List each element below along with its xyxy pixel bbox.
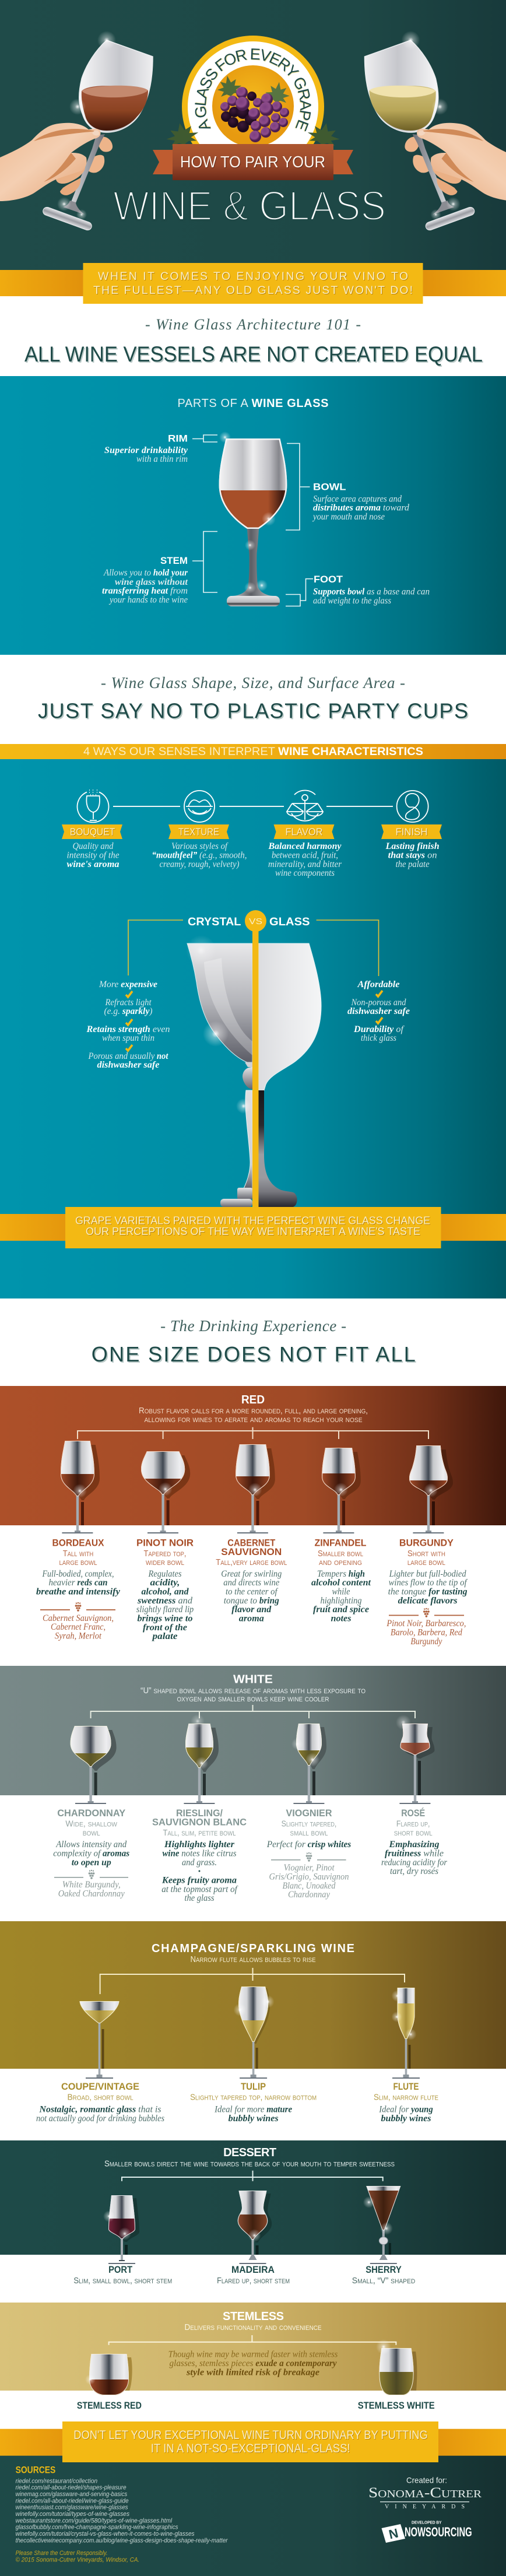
column: sherry: Small, “V” shaped bbox=[352, 2276, 415, 2286]
column: cabernet sauvignon: SAUVIGNON bbox=[221, 1546, 282, 1557]
glass: sherry bbox=[363, 2186, 401, 2264]
gold banner: closing message: DON'T LET YOUR EXCEPTIONAL WINE TURN ORDINARY BY PUTTING bbox=[73, 2428, 428, 2442]
label: bowl: your mouth and nose bbox=[312, 512, 385, 522]
column: chardonnay: to open up bbox=[72, 1858, 111, 1868]
glass: port bbox=[103, 2195, 139, 2264]
column: tulip: TULIP bbox=[241, 2081, 266, 2092]
column: bordeaux: heavier reds can bbox=[49, 1578, 108, 1588]
banner text: WHEN IT COMES TO ENJOYING YOUR VINO TO bbox=[98, 270, 408, 283]
stemless paragraph: Though wine may be warmed faster with stemless bbox=[168, 2350, 338, 2360]
column: rose: Emphasizing bbox=[389, 1840, 440, 1849]
column: cabernet sauvignon bbox=[216, 1538, 287, 1624]
column: chardonnay: complexity of aromas bbox=[53, 1849, 129, 1859]
logo: nowsourcing bbox=[381, 2521, 472, 2543]
column: madeira: Flared up, short stem bbox=[217, 2276, 290, 2286]
column: flute: Ideal for young bbox=[378, 2105, 433, 2115]
column: bordeaux: Tall with bbox=[63, 1549, 93, 1559]
column: port bbox=[73, 2264, 172, 2286]
glass: pinot noir bbox=[141, 1451, 190, 1533]
column: zinfandel: notes bbox=[331, 1614, 351, 1624]
grape clusters bbox=[220, 87, 289, 142]
banner: texture bbox=[168, 824, 229, 839]
sources heading: SOURCES bbox=[16, 2465, 55, 2476]
banner: finish bbox=[381, 824, 442, 839]
column: flute: FLUTE bbox=[393, 2081, 419, 2092]
column: chardonnay bbox=[53, 1808, 129, 1899]
text: flavor: between acid, fruit, bbox=[272, 851, 338, 861]
column: pinot noir: brings wine to bbox=[138, 1614, 192, 1624]
logo: nowsourcing: DEVELOPED BY bbox=[412, 2521, 442, 2525]
logo: sonoma-cutrer: Created for: bbox=[406, 2476, 447, 2485]
icon: grape divider bbox=[389, 1608, 464, 1617]
bracket bbox=[122, 2171, 383, 2181]
bracket bbox=[91, 1705, 415, 1718]
sources list: riedel.com/all-about-riedel/wine-glass-guide bbox=[16, 2497, 129, 2504]
subtitle: architecture 101: - Wine Glass Architecture 101 - bbox=[145, 316, 361, 333]
label: bowl bbox=[312, 482, 410, 522]
connector lines bbox=[113, 806, 393, 807]
column: burgundy: Pinot Noir, Barbaresco, bbox=[386, 1619, 466, 1629]
section description bbox=[140, 1686, 366, 1704]
stemless paragraph bbox=[168, 2350, 338, 2377]
column: pinot noir: front of the bbox=[143, 1623, 187, 1633]
column: riesling sauvignon blanc bbox=[152, 1808, 247, 1903]
column: burgundy: BURGUNDY bbox=[399, 1538, 454, 1549]
banner: bouquet bbox=[62, 824, 122, 839]
column: sherry: SHERRY bbox=[366, 2264, 402, 2275]
text: texture bbox=[152, 841, 247, 869]
text: flavor: wine components bbox=[275, 868, 335, 878]
section description: Narrow flute allows bubbles to rise bbox=[190, 1954, 316, 1964]
disclaimer: Please Share the Cutrer Responsibly. bbox=[16, 2550, 108, 2557]
panel title: PARTS OF A WINE GLASS bbox=[177, 397, 329, 410]
section description: Smaller bowls direct the wine towards the back of your mouth to temper sweetness bbox=[104, 2159, 395, 2169]
label: stem: transferring heat from bbox=[102, 586, 188, 596]
column: viognier: VIOGNIER bbox=[286, 1808, 332, 1819]
column: riesling sauvignon blanc: Keeps fruity aroma bbox=[161, 1876, 237, 1886]
label: stem bbox=[102, 555, 188, 605]
column: flute: bubbly wines bbox=[381, 2114, 431, 2124]
gold banner: grape varietals: OUR PERCEPTIONS OF THE WAY WE INTERPRET A WINE'S TASTE bbox=[86, 1225, 420, 1237]
glass: stemless white bbox=[376, 2339, 417, 2395]
text: bouquet: wine's aroma bbox=[66, 859, 119, 869]
glass: burgundy bbox=[409, 1445, 453, 1533]
column: viognier: small bowl bbox=[290, 1828, 328, 1838]
label: rim bbox=[104, 433, 188, 464]
column: zinfandel: and opening bbox=[319, 1557, 362, 1567]
column: rose: tart, dry rosés bbox=[390, 1866, 438, 1876]
list: glass traits bbox=[347, 980, 410, 1043]
column: rose: ROSÉ bbox=[401, 1808, 425, 1819]
label: foot bbox=[313, 574, 430, 606]
column: pinot noir: alcohol, and bbox=[141, 1587, 189, 1597]
column: viognier: Gris/Grigio, Sauvignon bbox=[269, 1872, 349, 1882]
column: madeira bbox=[217, 2264, 290, 2286]
stemless paragraph: style with limited risk of breakage bbox=[186, 2367, 319, 2377]
column: burgundy: Short with bbox=[407, 1549, 445, 1559]
label: foot: add weight to the glass bbox=[313, 596, 391, 606]
column: chardonnay: Oaked Chardonnay bbox=[58, 1889, 125, 1899]
section description: oxygen and smaller bowls keep wine cooler bbox=[177, 1694, 329, 1704]
column: pinot noir: wider bowl bbox=[146, 1557, 184, 1567]
list: crystal traits: Refracts light bbox=[105, 998, 152, 1008]
section title: RED bbox=[241, 1394, 265, 1406]
glass: zinfandel bbox=[322, 1448, 361, 1533]
text: bouquet: Quality and bbox=[72, 841, 114, 851]
text: finish: that stays on bbox=[388, 851, 437, 861]
column: bordeaux: Syrah, Merlot bbox=[55, 1631, 101, 1641]
icon: flavor scale bbox=[287, 790, 323, 821]
column: bordeaux: breathe and intensify bbox=[36, 1587, 121, 1597]
column: viognier: Viognier, Pinot bbox=[283, 1863, 335, 1873]
column: burgundy: large bowl bbox=[407, 1557, 445, 1567]
label: stemless red: STEMLESS RED bbox=[77, 2400, 142, 2411]
list: crystal traits: More expensive bbox=[99, 980, 157, 989]
panel: header bbox=[0, 0, 506, 270]
right hand holding white wine glass bbox=[365, 31, 506, 231]
label: stem: STEM bbox=[160, 555, 188, 566]
column: cabernet sauvignon: Great for swirling bbox=[221, 1569, 282, 1579]
column: burgundy: the tongue for tasting bbox=[388, 1587, 468, 1597]
gold strip: 4 ways: 4 WAYS OUR SENSES INTERPRET WINE CHARACTERISTICS bbox=[83, 745, 423, 758]
gold strip: 4 ways bbox=[0, 744, 506, 759]
column: zinfandel: while bbox=[332, 1587, 350, 1597]
label: bowl: BOWL bbox=[313, 482, 346, 492]
subtitle: shape size surface area: - Wine Glass Shape, Size, and Surface Area - bbox=[101, 674, 405, 692]
column: rose: Flared up, bbox=[396, 1819, 430, 1829]
text: bouquet bbox=[66, 841, 119, 869]
column: tulip: Ideal for more mature bbox=[214, 2105, 292, 2115]
text: bouquet: intensity of the bbox=[66, 851, 119, 861]
column: pinot noir: PINOT NOIR bbox=[136, 1538, 194, 1549]
column: riesling sauvignon blanc: Tall, slim, petite bowl bbox=[163, 1828, 236, 1838]
label: rim: with a thin rim bbox=[136, 454, 188, 464]
logo: nowsourcing: N bbox=[388, 2526, 400, 2542]
column: cabernet sauvignon: CABERNET bbox=[227, 1538, 276, 1549]
panel: dessert bbox=[0, 2140, 506, 2264]
banner: bouquet: BOUQUET bbox=[70, 826, 115, 838]
glass: tulip bbox=[234, 1987, 275, 2079]
column: flute: Slim, narrow flute bbox=[374, 2093, 438, 2103]
column: burgundy bbox=[386, 1538, 468, 1647]
glass: chardonnay bbox=[71, 1726, 117, 1804]
text: flavor: minerality, and bitter bbox=[268, 859, 342, 869]
panel: footer bbox=[0, 2455, 506, 2576]
icon: grape divider bbox=[271, 1852, 346, 1862]
column: bordeaux bbox=[36, 1538, 121, 1641]
icon: texture lips bbox=[184, 791, 215, 822]
glass: cabernet sauvignon bbox=[236, 1444, 275, 1533]
gold banner: intro bbox=[0, 263, 506, 304]
column: bordeaux: Full-bodied, complex, bbox=[42, 1569, 114, 1579]
bracket bbox=[100, 1968, 405, 1994]
badge arc text: A GLASS FOR EVERY GRAPE bbox=[195, 48, 311, 132]
bracket lines bbox=[192, 435, 313, 606]
gold banner: closing message bbox=[0, 2421, 506, 2462]
label: foot: Supports bowl as a base and can bbox=[313, 587, 430, 597]
section description: “U” shaped bowl allows release of aromas with less exposure to bbox=[140, 1686, 366, 1696]
list: crystal traits bbox=[86, 980, 170, 1070]
grape leaves bbox=[164, 73, 342, 148]
section title: STEMLESS bbox=[223, 2310, 284, 2323]
icon: grape divider bbox=[40, 1602, 115, 1612]
column: viognier: Slightly tapered, bbox=[282, 1819, 336, 1829]
large glass diagram bbox=[219, 431, 287, 606]
column: zinfandel bbox=[311, 1538, 371, 1624]
icon: bouquet glass bbox=[77, 790, 108, 822]
label: foot: FOOT bbox=[314, 574, 343, 585]
heading: crystal vs glass: GLASS bbox=[269, 916, 310, 928]
section title: WHITE bbox=[233, 1673, 273, 1686]
column: zinfandel: alcohol content bbox=[311, 1578, 371, 1588]
sources list: winefolly.com/tutorial/types-of-wine-glasses bbox=[16, 2511, 130, 2518]
sources list: riedel.com/all-about-riedel/shapes-pleasure bbox=[16, 2484, 126, 2491]
column: zinfandel: Tempers high bbox=[317, 1569, 365, 1579]
column: port: Slim, small bowl, short stem bbox=[73, 2276, 172, 2286]
icon: finish loop bbox=[397, 791, 428, 822]
sources list: riedel.com/restaurant/collection bbox=[16, 2477, 97, 2484]
column: chardonnay: Allows intensity and bbox=[55, 1840, 127, 1849]
panel: red bbox=[0, 1386, 506, 1533]
label: bowl: distributes aroma toward bbox=[313, 503, 410, 513]
column: viognier: Perfect for crisp whites bbox=[266, 1840, 351, 1849]
column: rose bbox=[381, 1808, 448, 1876]
stemless paragraph: glasses, stemless pieces exude a contemporary bbox=[169, 2359, 337, 2368]
icon: grape divider bbox=[54, 1870, 128, 1879]
half glass illustration: crystal and glass bbox=[186, 927, 321, 1207]
logo: sonoma-cutrer: VINEYARDS bbox=[385, 2504, 465, 2510]
label: bowl: Surface area captures and bbox=[313, 494, 402, 504]
list: crystal traits: Retains strength even bbox=[86, 1024, 170, 1034]
section description: Delivers functionality and convenience bbox=[184, 2322, 322, 2332]
column: cabernet sauvignon: to the center of bbox=[226, 1587, 279, 1597]
column: zinfandel: highlighting bbox=[321, 1596, 361, 1606]
glass: bordeaux bbox=[61, 1441, 100, 1533]
label: stem: your hands to the wine bbox=[108, 595, 188, 605]
column: riesling sauvignon blanc: the glass bbox=[184, 1893, 215, 1903]
label: stemless white: STEMLESS WHITE bbox=[358, 2400, 435, 2411]
glass: riesling bbox=[184, 1714, 219, 1804]
banner text bbox=[93, 270, 413, 297]
logo: nowsourcing: NOWSOURCING bbox=[405, 2525, 472, 2539]
column: riesling sauvignon blanc: SAUVIGNON BLANC bbox=[152, 1817, 247, 1828]
sources list: wineenthusiast.com/glassware/wine-glasses bbox=[16, 2504, 128, 2511]
heading: all wine vessels: ALL WINE VESSELS ARE NOT CREATED EQUAL bbox=[24, 342, 483, 366]
bracket bbox=[78, 1427, 428, 1439]
heading: crystal vs glass bbox=[188, 910, 310, 932]
column: pinot noir: sweetness and bbox=[137, 1596, 193, 1606]
column: pinot noir: slightly flared lip bbox=[136, 1605, 194, 1615]
column: sherry bbox=[352, 2264, 415, 2286]
text: finish: the palate bbox=[396, 859, 430, 869]
column: zinfandel: fruit and spice bbox=[313, 1605, 369, 1615]
column: chardonnay: bowl bbox=[83, 1828, 100, 1838]
ribbon: how to pair your bbox=[153, 144, 353, 180]
label: rim: RIM bbox=[168, 433, 188, 444]
disclaimer bbox=[16, 2550, 139, 2564]
panel: parts of a wine glass bbox=[0, 376, 506, 655]
ribbon text: HOW TO PAIR YOUR bbox=[180, 153, 325, 171]
text: finish: Lasting finish bbox=[385, 841, 440, 851]
column: pinot noir: palate bbox=[151, 1631, 177, 1641]
gold banner: grape varietals: GRAPE VARIETALS PAIRED WITH THE PERFECT WINE GLASS CHANGE bbox=[75, 1215, 430, 1227]
column: viognier: Chardonnay bbox=[288, 1890, 331, 1900]
column: pinot noir: acidity, bbox=[150, 1578, 180, 1588]
section description bbox=[139, 1406, 368, 1424]
column: chardonnay: Wide, shallow bbox=[65, 1819, 118, 1829]
column: coupe vintage: not actually good for drinking bubbles bbox=[36, 2114, 164, 2124]
column: tulip: bubbly wines bbox=[229, 2114, 279, 2124]
panel: champagne bbox=[0, 1921, 506, 2079]
column: flute bbox=[374, 2081, 438, 2124]
column: burgundy: Burgundy bbox=[410, 1637, 442, 1647]
sources list: glassofbubbly.com/free-champagne-sparkling-wine-infographics bbox=[16, 2524, 178, 2531]
column: burgundy: wines flow to the tip of bbox=[389, 1578, 468, 1588]
crystal vs glass connectors bbox=[128, 920, 379, 976]
column: bordeaux: Cabernet Franc, bbox=[51, 1622, 106, 1632]
column: pinot noir bbox=[136, 1538, 194, 1641]
text: texture: Various styles of bbox=[171, 841, 229, 851]
column: cabernet sauvignon: flavor and bbox=[231, 1605, 272, 1615]
text: texture: “mouthfeel” (e.g., smooth, bbox=[152, 851, 247, 861]
column: burgundy: Lighter but full-bodied bbox=[389, 1569, 466, 1579]
list: glass traits: dishwasher safe bbox=[347, 1006, 410, 1016]
sources list: webstaurantstore.com/guide/580/types-of-wine-glasses.html bbox=[16, 2517, 173, 2524]
label: stem: Allows you to hold your bbox=[103, 568, 188, 578]
list: crystal traits: (e.g. sparkly) bbox=[104, 1006, 153, 1016]
section description: allowing for wines to aerate and aromas to reach your nose bbox=[145, 1415, 363, 1424]
column: cabernet sauvignon: Tall,very large bowl bbox=[216, 1557, 287, 1567]
heading: plastic party cups: JUST SAY NO TO PLASTIC PARTY CUPS bbox=[38, 699, 468, 723]
column: zinfandel: Smaller bowl bbox=[318, 1549, 363, 1559]
column: burgundy: Barolo, Barbera, Red bbox=[391, 1628, 463, 1638]
bracket bbox=[109, 2335, 396, 2345]
logo: sonoma-cutrer bbox=[368, 2476, 482, 2510]
text: flavor bbox=[268, 841, 342, 878]
column: viognier: Blanc, Unoaked bbox=[282, 1881, 336, 1891]
list: crystal traits: when spun thin bbox=[102, 1033, 154, 1043]
column: riesling sauvignon blanc: RIESLING/ bbox=[176, 1808, 223, 1819]
text: texture: creamy, rough, velvety) bbox=[160, 859, 239, 869]
banner: texture: TEXTURE bbox=[178, 826, 219, 838]
glass: flute bbox=[392, 1988, 420, 2079]
column: coupe vintage: COUPE/VINTAGE bbox=[61, 2081, 139, 2092]
list: crystal traits: dishwasher safe bbox=[97, 1060, 160, 1070]
column: cabernet sauvignon: tongue to bring bbox=[224, 1596, 279, 1606]
banner: finish: FINISH bbox=[395, 826, 428, 838]
column: pinot noir: Tapered top, bbox=[143, 1549, 187, 1559]
subtitle: drinking experience: - The Drinking Experience - bbox=[160, 1317, 346, 1335]
sources list: winefolly.com/tutorial/crystal-vs-glass-when-it-comes-to-wine-glasses bbox=[16, 2531, 195, 2538]
column: tulip: Slightly tapered top, narrow bottom bbox=[190, 2093, 317, 2103]
column: cabernet sauvignon: aroma bbox=[239, 1614, 264, 1624]
disclaimer: © 2015 Sonoma-Cutrer Vineyards, Windsor, CA. bbox=[16, 2557, 139, 2564]
panel: stemless bbox=[0, 2303, 506, 2395]
column: pinot noir: Regulates bbox=[148, 1569, 182, 1579]
list: glass traits: Affordable bbox=[357, 980, 400, 989]
column: riesling sauvignon blanc: and grass. bbox=[182, 1858, 217, 1868]
glass: rose bbox=[396, 1715, 435, 1804]
text: flavor: Balanced harmony bbox=[268, 841, 342, 851]
section title: DESSERT bbox=[223, 2146, 276, 2159]
left hand holding red wine glass bbox=[0, 31, 153, 231]
column: rose: short bowl bbox=[394, 1828, 433, 1838]
list: glass traits: thick glass bbox=[361, 1033, 396, 1043]
glass: madeira bbox=[238, 2191, 272, 2264]
panel: white bbox=[0, 1666, 506, 1804]
list: glass traits: Non-porous and bbox=[351, 998, 406, 1008]
logo: a glass for every grape badge bbox=[167, 36, 339, 146]
sources list bbox=[16, 2477, 229, 2545]
label: rim: Superior drinkability bbox=[104, 445, 188, 455]
glass: coupe bbox=[79, 2001, 119, 2079]
column: tulip bbox=[190, 2081, 317, 2124]
logo: sonoma-cutrer: Sonoma-Cutrer bbox=[368, 2485, 482, 2501]
text: finish bbox=[385, 841, 440, 869]
column: coupe vintage: Nostalgic, romantic glass that is bbox=[39, 2105, 161, 2115]
column: rose: fruitiness while bbox=[385, 1849, 444, 1859]
banner: flavor: FLAVOR bbox=[286, 826, 323, 838]
banner text: THE FULLEST—ANY OLD GLASS JUST WON'T DO! bbox=[93, 284, 413, 297]
column: coupe vintage: Broad, short bowl bbox=[68, 2093, 133, 2103]
label: stem: wine glass without bbox=[115, 577, 188, 587]
banner: flavor bbox=[274, 824, 335, 839]
sources list: thecollectivewinecompany.com.au/blog/wine-glass-design-does-shape-really-matter bbox=[16, 2538, 229, 2545]
column: bordeaux: Cabernet Sauvignon, bbox=[43, 1613, 114, 1623]
column: zinfandel: ZINFANDEL bbox=[315, 1538, 366, 1549]
section title: CHAMPAGNE/SPARKLING WINE bbox=[152, 1942, 354, 1955]
panel: senses and crystal vs glass bbox=[0, 744, 506, 1298]
column: madeira: MADEIRA bbox=[231, 2264, 275, 2275]
heading: one size: ONE SIZE DOES NOT FIT ALL bbox=[92, 1342, 416, 1366]
list: crystal traits: Porous and usually not bbox=[88, 1051, 168, 1061]
column: riesling sauvignon blanc: at the topmost part of bbox=[161, 1884, 238, 1894]
column: coupe vintage bbox=[36, 2081, 164, 2124]
column: bordeaux: large bowl bbox=[59, 1557, 97, 1567]
column: burgundy: delicate flavors bbox=[398, 1596, 458, 1606]
column: riesling sauvignon blanc: Highlights lighter bbox=[164, 1840, 235, 1849]
section description: Robust flavor calls for a more rounded, full, and large opening, bbox=[139, 1406, 368, 1416]
column: chardonnay: CHARDONNAY bbox=[57, 1808, 126, 1819]
glass: stemless red bbox=[85, 2354, 132, 2395]
column: riesling sauvignon blanc: wine notes like citrus bbox=[162, 1849, 237, 1859]
column: bordeaux: BORDEAUX bbox=[52, 1538, 104, 1549]
glass: viognier bbox=[291, 1724, 326, 1804]
column: rose: reducing acidity for bbox=[381, 1858, 448, 1868]
column: chardonnay: White Burgundy, bbox=[62, 1880, 121, 1890]
heading: crystal vs glass: VS bbox=[249, 917, 262, 926]
sources list: winemag.com/glassware-and-serving-basics bbox=[16, 2491, 128, 2498]
list: glass traits: Durability of bbox=[353, 1024, 405, 1034]
heading: crystal vs glass: CRYSTAL bbox=[188, 916, 241, 928]
column: port: PORT bbox=[108, 2264, 133, 2275]
main title: WINE & GLASS bbox=[113, 183, 386, 230]
gold banner: grape varietals bbox=[0, 1207, 506, 1248]
gold banner: closing message: IT IN A NOT-SO-EXCEPTIONAL-GLASS! bbox=[151, 2442, 350, 2455]
column: cabernet sauvignon: and directs wine bbox=[223, 1578, 279, 1588]
column: viognier bbox=[266, 1808, 351, 1900]
